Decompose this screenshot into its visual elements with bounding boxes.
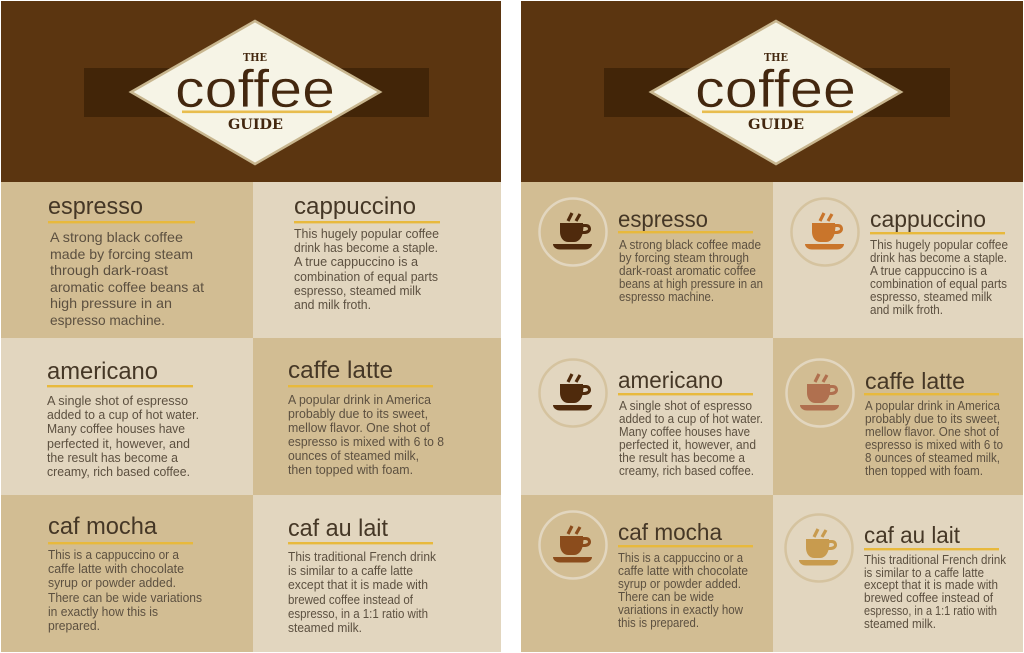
card: caffe latte: A popular drink in America — [288, 393, 431, 407]
card: cappuccino: drink has become a staple. — [294, 241, 438, 255]
card: caf au lait with icon: espresso, in a 1:1 ratio with — [864, 604, 997, 618]
card: americano with icon — [540, 360, 763, 478]
card: caf mocha with icon: syrup or powder added. — [618, 577, 741, 591]
card: americano with icon: Many coffee houses have — [619, 425, 750, 439]
card: americano: Many coffee houses have — [47, 422, 185, 436]
left header: THE — [243, 51, 267, 64]
card: espresso: high pressure in an — [50, 295, 172, 311]
card: caf au lait: except that it is made with — [288, 578, 428, 592]
card: cappuccino: espresso, steamed milk — [294, 284, 422, 298]
icon: dark brown cup — [540, 360, 606, 426]
card: americano: perfected it, however, and — [47, 437, 190, 451]
card: americano with icon: the result has become a — [619, 451, 745, 465]
card: cappuccino: combination of equal parts — [294, 270, 438, 284]
left header — [1, 1, 501, 182]
card: americano with icon: americano — [618, 367, 723, 393]
card: espresso with icon: espresso — [618, 206, 708, 232]
right card backgrounds — [521, 182, 1023, 652]
card: caffe latte: mellow flavor. One shot of — [288, 421, 430, 435]
card: caf mocha: caf mocha — [48, 513, 158, 540]
card: caf mocha: caffe latte with chocolate — [48, 562, 184, 576]
card: espresso with icon: espresso machine. — [619, 290, 714, 304]
card: caffe latte: ounces of steamed milk, — [288, 449, 419, 463]
card: caffe latte with icon: A popular drink in America — [865, 399, 1000, 413]
icon: medium brown cup — [540, 512, 606, 578]
card: espresso: espresso machine. — [50, 312, 165, 328]
card: americano with icon: perfected it, however, and — [619, 438, 756, 452]
right header: THE — [764, 51, 788, 64]
card: caf mocha with icon: There can be wide — [618, 590, 714, 604]
card: americano — [47, 358, 199, 479]
card: caf mocha with icon: variations in exactly how — [618, 603, 744, 617]
card: caf mocha with icon — [540, 512, 753, 630]
card: caffe latte: caffe latte — [288, 357, 393, 384]
card: espresso: made by forcing steam — [50, 246, 193, 262]
card: caf au lait with icon — [786, 514, 1007, 631]
icon: terracotta cup — [786, 360, 854, 426]
card: espresso with icon: by forcing steam through — [619, 251, 749, 265]
card: caffe latte — [288, 357, 444, 477]
card: espresso with icon — [540, 198, 763, 304]
card: caf mocha — [48, 513, 202, 633]
card: caf au lait with icon: caf au lait — [864, 522, 961, 548]
card: caf au lait with icon: This traditional French drink — [864, 553, 1007, 567]
card: caf mocha: in exactly how this is — [48, 605, 158, 619]
card: caf au lait with icon: brewed coffee instead of — [864, 591, 993, 605]
card: espresso — [48, 193, 204, 328]
card: americano with icon: creamy, rich based coffee. — [619, 464, 754, 478]
card: americano: the result has become a — [47, 451, 178, 465]
card: espresso with icon: beans at high pressure in an — [619, 277, 763, 291]
card: cappuccino: A true cappuccino is a — [294, 255, 418, 269]
right header: coffee — [695, 60, 856, 119]
icon: golden cup — [786, 514, 852, 582]
card: caf mocha with icon: caf mocha — [618, 519, 722, 545]
card: caffe latte with icon: mellow flavor. One shot of — [865, 425, 999, 439]
card: americano: creamy, rich based coffee. — [47, 465, 190, 479]
card: caf au lait: steamed milk. — [288, 621, 362, 635]
icon: orange cup — [792, 198, 858, 266]
card: caf au lait with icon: is similar to a caffe latte — [864, 566, 984, 580]
card: caf mocha with icon: caffe latte with chocolate — [618, 564, 748, 578]
card: caf au lait with icon: except that it is made with — [864, 578, 998, 592]
right header — [521, 1, 1023, 182]
card: caf au lait: is similar to a caffe latte — [288, 564, 413, 578]
card: americano with icon: added to a cup of hot water. — [619, 412, 763, 426]
card: caffe latte with icon: 8 ounces of steamed milk, — [865, 451, 1000, 465]
card: espresso with icon: A strong black coffee made — [619, 238, 761, 252]
card: caffe latte with icon: probably due to its sweet, — [865, 412, 1000, 426]
card: caf au lait — [288, 515, 437, 635]
card: cappuccino with icon — [792, 198, 1008, 317]
card: cappuccino: and milk froth. — [294, 298, 371, 312]
card: caf mocha: This is a cappuccino or a — [48, 548, 179, 562]
card: caf mocha: syrup or powder added. — [48, 576, 176, 590]
card: espresso: through dark-roast — [50, 262, 168, 278]
card: cappuccino with icon: A true cappuccino is a — [870, 264, 987, 278]
card: caf mocha: prepared. — [48, 619, 100, 633]
card: caffe latte: espresso is mixed with 6 to 8 — [288, 435, 444, 449]
card: cappuccino with icon: espresso, steamed milk — [870, 290, 993, 304]
icon: dark brown cup — [540, 198, 606, 266]
left header: GUIDE — [228, 117, 283, 133]
left header: coffee — [175, 60, 335, 119]
card: caf mocha with icon: This is a cappuccino or a — [618, 551, 743, 565]
card: americano with icon: A single shot of espresso — [619, 399, 752, 413]
card: espresso: A strong black coffee — [50, 229, 183, 245]
card: cappuccino with icon: and milk froth. — [870, 303, 943, 317]
card: cappuccino: This hugely popular coffee — [294, 227, 439, 241]
card: americano: added to a cup of hot water. — [47, 408, 199, 422]
card: cappuccino: cappuccino — [294, 193, 416, 220]
card: cappuccino with icon: combination of equal parts — [870, 277, 1007, 291]
card: caf mocha: There can be wide variations — [48, 591, 202, 605]
card: caf mocha with icon: this is prepared. — [618, 616, 699, 630]
panel: right guide (with icons) — [521, 1, 1023, 652]
card: caf au lait: This traditional French drink — [288, 550, 437, 564]
card: cappuccino with icon: cappuccino — [870, 206, 986, 232]
card: caffe latte with icon — [786, 360, 1003, 478]
card: caf au lait with icon: steamed milk. — [864, 617, 936, 631]
card: americano: americano — [47, 358, 158, 385]
card: caffe latte with icon: then topped with foam. — [865, 464, 983, 478]
card: espresso: aromatic coffee beans at — [50, 279, 204, 295]
card: cappuccino with icon: This hugely popular coffee — [870, 238, 1008, 252]
left card backgrounds — [1, 182, 501, 652]
card: caffe latte: then topped with foam. — [288, 463, 413, 477]
card: espresso with icon: dark-roast aromatic coffee — [619, 264, 756, 278]
card: caf au lait: espresso, in a 1:1 ratio with — [288, 607, 428, 621]
card: cappuccino with icon: drink has become a staple. — [870, 251, 1007, 265]
right header: GUIDE — [748, 117, 804, 133]
card: cappuccino — [294, 193, 440, 312]
card: caffe latte with icon: espresso is mixed with 6 to — [865, 438, 1003, 452]
card: espresso: espresso — [48, 193, 143, 220]
card: caf au lait: caf au lait — [288, 515, 388, 542]
card: caf au lait: brewed coffee instead of — [288, 593, 413, 607]
card: caffe latte: probably due to its sweet, — [288, 407, 428, 421]
card: caffe latte with icon: caffe latte — [865, 368, 965, 394]
card: americano: A single shot of espresso — [47, 394, 188, 408]
panel: left guide (text only) — [1, 1, 501, 652]
